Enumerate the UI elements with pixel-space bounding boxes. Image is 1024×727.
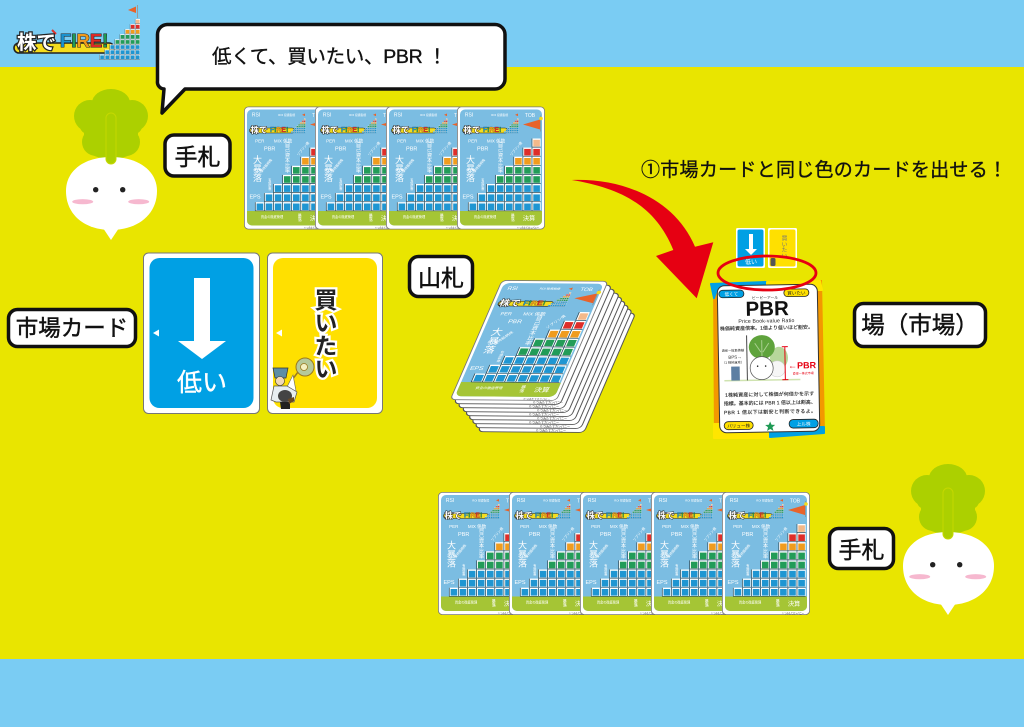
card 5: PBR	[742, 532, 753, 538]
card 1: 暴落	[298, 212, 303, 222]
card 2: ROI 投資指標	[543, 498, 560, 502]
top card of deck: EPS	[469, 366, 485, 372]
card 4: 決算	[523, 214, 535, 222]
card 1	[438, 492, 526, 615]
card 2: 株で	[321, 125, 339, 135]
top card of deck: TOB	[579, 288, 594, 293]
top card of deck	[450, 280, 608, 401]
mini card: 買いたい: 買いたい	[780, 235, 787, 259]
card 4: EPS	[462, 194, 474, 200]
logo: 株でFIRE!	[14, 5, 140, 59]
card 2: 有価証券	[339, 177, 343, 191]
top card of deck: © つみたてカンパニー	[523, 397, 551, 401]
card 3: RSI	[394, 112, 402, 118]
card 1: EPS	[249, 194, 261, 200]
explanation text	[724, 390, 816, 416]
card 2: 自己資本比率	[355, 140, 361, 174]
card 4: 優待銘柄株	[665, 542, 681, 559]
field card: PBR	[711, 280, 825, 439]
card 2: © つみたてカンパニー	[569, 611, 591, 615]
card 3: 自己資本比率	[426, 140, 432, 174]
card 1: FIRE!	[270, 127, 288, 134]
card 4: ROI 投資指標	[685, 498, 702, 502]
card 3: TOB	[648, 498, 659, 504]
illustration: radish price vs book value: （1 株純資産）	[722, 359, 744, 365]
card 1: PBR	[458, 532, 469, 538]
colored card edges	[711, 280, 825, 439]
illustration: radish price vs book value	[721, 334, 817, 381]
card 1: © つみたてカンパニー	[304, 226, 326, 230]
card 1: 大暴落	[252, 154, 262, 183]
card 2: 暴落	[369, 212, 374, 222]
card 4: 大暴落	[659, 539, 669, 568]
card face: PBR	[745, 297, 789, 321]
card 5: EPS	[727, 580, 739, 586]
card 3	[386, 107, 474, 230]
pill: 買いたい: 買いたい	[787, 291, 806, 297]
card 3: 決算	[646, 600, 658, 608]
label: 手札 (top)	[165, 135, 230, 176]
card 3: © つみたてカンパニー	[446, 226, 468, 230]
card 5: FIRE!	[748, 512, 766, 520]
pill: 低くて: 低くて	[724, 291, 739, 298]
card 1: TOB	[506, 498, 517, 504]
card 5: 有価証券	[746, 563, 750, 577]
card 5: TOB	[790, 498, 801, 504]
card 4: ソブリン債	[508, 140, 524, 157]
pill: 買いたい	[784, 289, 809, 297]
card 4: FIRE!	[483, 127, 501, 134]
card 3: TOB	[454, 113, 465, 119]
card 2: 株で	[515, 510, 533, 520]
deck: 山札 stack of cards: © つみたてカンパニー	[537, 416, 567, 420]
card 4: PBR	[477, 146, 488, 152]
card face: Price Book-value Ratio	[738, 318, 795, 325]
card 4: RSI	[659, 498, 667, 504]
card 1: ソブリン債	[295, 140, 311, 157]
card 2: 決算	[381, 214, 393, 222]
card 1: 自己資本比率	[284, 140, 290, 174]
card 2: 資金の徹底管理	[332, 214, 355, 219]
card 1: ソブリン債	[489, 525, 505, 542]
top card of deck: 自己資本比率	[522, 314, 544, 347]
card 5: 株で	[728, 510, 746, 520]
card 4: 優待銘柄株	[471, 157, 487, 174]
card 2: RSI	[323, 112, 331, 118]
card 5	[722, 492, 810, 615]
card 1: 大暴落	[446, 539, 456, 568]
illustration: radish price vs book value: 直接ー株式市場	[793, 370, 814, 376]
card 2: EPS	[320, 194, 332, 200]
card 3: EPS	[585, 580, 597, 586]
card 1: TOB	[312, 113, 323, 119]
card 5: ソブリン債	[773, 525, 789, 542]
card 4: 資金の徹底管理	[474, 214, 497, 219]
card 4: RSI	[465, 112, 473, 118]
card 1: FIRE!	[464, 512, 482, 520]
card 2: 有価証券	[533, 563, 537, 577]
card 4: 暴落	[511, 212, 516, 222]
card 1: RSI	[252, 112, 260, 118]
mini card: 低い: 低い	[745, 258, 757, 266]
card 3: MIX 係数	[416, 138, 435, 144]
card 2: PER	[520, 524, 530, 529]
top card of deck: PBR	[507, 319, 524, 325]
card 3: 優待銘柄株	[594, 542, 610, 559]
label: 場（市場）	[854, 304, 986, 346]
card 4: 自己資本比率	[691, 526, 697, 560]
label: 山札: 山札	[418, 265, 464, 291]
card 1: 暴落	[492, 598, 497, 608]
card 4: PBR	[671, 532, 682, 538]
card 4: © つみたてカンパニー	[711, 611, 733, 615]
card 3: ROI 投資指標	[614, 498, 631, 502]
card 2: 優待銘柄株	[329, 157, 345, 174]
card 4: FIRE!	[677, 512, 695, 520]
pill: バリュー株: バリュー株	[727, 422, 751, 430]
speech bubble	[157, 24, 505, 113]
card 5: ROI 投資指標	[756, 498, 773, 502]
card 2: 資金の徹底管理	[526, 600, 549, 604]
top card of deck: ROI 投資指標	[539, 286, 562, 291]
card 1: ROI 投資指標	[278, 113, 295, 117]
instruction heading: ①市場カードと同じ色のカードを出せる！	[641, 159, 1007, 181]
card 3: 大暴落	[588, 539, 598, 568]
card 3: 暴落	[440, 212, 445, 222]
card 2: EPS	[514, 580, 526, 586]
top card of deck: 暴落	[518, 385, 528, 394]
top card of deck: 優待銘柄株	[493, 330, 514, 346]
top card of deck: 株で	[497, 298, 523, 309]
card 2	[509, 492, 597, 615]
pill: 上ル株	[789, 419, 818, 428]
card 3: ソブリン債	[437, 140, 453, 157]
card 4: MIX 係数	[681, 523, 700, 530]
card 3: 有価証券	[410, 177, 414, 191]
card 1: 優待銘柄株	[452, 542, 468, 559]
card 5: 暴落	[776, 598, 781, 608]
card 4: 暴落	[705, 598, 710, 608]
card 3: MIX 係数	[610, 523, 629, 530]
card 4	[457, 107, 545, 230]
card 1: 資金の徹底管理	[261, 214, 284, 219]
pill: 上ル株: 上ル株	[797, 420, 811, 428]
deck: 山札 stack of cards: © つみたてカンパニー	[540, 424, 570, 428]
card 3	[580, 492, 668, 615]
card 5: RSI	[730, 498, 738, 504]
top card of deck: 大暴落	[479, 327, 504, 355]
card 3: 決算	[452, 214, 464, 222]
card 4: 大暴落	[465, 154, 475, 183]
card 1: 自己資本比率	[478, 526, 484, 560]
card 1: EPS	[443, 580, 455, 586]
card 3: PBR	[600, 532, 611, 538]
label: 手札 (top): 手札	[174, 144, 220, 170]
pill: バリュー株	[724, 421, 753, 430]
card 3: PER	[397, 138, 407, 144]
deck: 山札 stack of cards: © つみたてカンパニー	[537, 408, 567, 412]
card 4: 自己資本比率	[497, 140, 503, 174]
deck: 山札 stack of cards: © つみたてカンパニー	[529, 412, 559, 416]
character: radish bottom right	[903, 464, 994, 615]
highlight: red ellipse	[718, 256, 816, 290]
card 2: RSI	[517, 498, 525, 504]
card 3: 大暴落	[394, 154, 404, 183]
card 1	[244, 107, 332, 230]
label: 市場カード: 市場カード	[16, 316, 128, 341]
card 2: TOB	[577, 498, 588, 504]
hand cards (bottom)	[438, 492, 810, 615]
card 3: 資金の徹底管理	[597, 600, 620, 604]
card 5: MIX 係数	[752, 523, 771, 530]
card 3: 株で	[392, 125, 410, 135]
card 3: FIRE!	[412, 127, 430, 134]
card 3: PBR	[406, 146, 417, 152]
card 1: 有価証券	[268, 177, 272, 191]
card 4: PER	[468, 138, 478, 144]
card 3: ソブリン債	[631, 525, 647, 542]
deck: 山札 stack of cards: © つみたてカンパニー	[529, 420, 559, 424]
card 2: FIRE!	[535, 512, 553, 520]
card 3: © つみたてカンパニー	[640, 611, 662, 615]
card 3: 自己資本比率	[620, 526, 626, 560]
icon: samurai mascot with fan	[271, 358, 314, 409]
card 2: MIX 係数	[539, 523, 558, 530]
logo: 株でFIRE!: 株で	[17, 32, 56, 54]
card 2: ROI 投資指標	[349, 113, 366, 117]
top card of deck: 決算	[533, 386, 551, 394]
card 2: PER	[326, 138, 336, 144]
top card of deck: RSI	[506, 286, 519, 292]
top card of deck: PER	[499, 312, 513, 317]
card 1: 有価証券	[462, 563, 466, 577]
card 1: 優待銘柄株	[258, 157, 274, 174]
card 3: ROI 投資指標	[420, 113, 437, 117]
card 3: FIRE!	[606, 512, 624, 520]
top card of deck: 有価証券	[495, 350, 505, 363]
card 2: TOB	[383, 113, 394, 119]
card 5: 大暴落	[730, 539, 740, 568]
card 1: ROI 投資指標	[472, 498, 489, 502]
card 4: 有価証券	[481, 177, 485, 191]
card 2: © つみたてカンパニー	[375, 226, 397, 230]
card 1: PER	[449, 524, 459, 529]
explanation text: 指標。基本的には PBR 1 倍以上は割高、	[724, 399, 816, 407]
card 4: 株で	[463, 125, 481, 135]
hand cards (top)	[244, 107, 545, 230]
label: 手札 (bottom): 手札	[838, 537, 884, 563]
top card of deck: MIX 係数	[522, 310, 547, 317]
card 4: MIX 係数	[487, 138, 506, 144]
card 1: MIX 係数	[468, 523, 487, 530]
card face	[717, 284, 820, 433]
icon: star	[765, 421, 775, 431]
illustration: radish price vs book value: 資産ー総負債額	[722, 347, 745, 353]
label: 場（市場）: 場（市場）	[861, 312, 979, 338]
card 4: 資金の徹底管理	[668, 600, 691, 604]
card 2: FIRE!	[341, 127, 359, 134]
card 4: 有価証券	[675, 563, 679, 577]
card 3: 有価証券	[604, 563, 608, 577]
card 2: 決算	[575, 600, 587, 608]
card 3: 暴落	[634, 598, 639, 608]
card 4: ソブリン債	[702, 525, 718, 542]
card 2: 大暴落	[517, 539, 527, 568]
card 2: 優待銘柄株	[523, 542, 539, 559]
card 3: 優待銘柄株	[400, 157, 416, 174]
card 3: 資金の徹底管理	[403, 214, 426, 219]
logo: 株でFIRE!: FIRE!	[60, 30, 108, 51]
mini market cards above field	[736, 228, 797, 268]
deck: 山札 stack of cards: © つみたてカンパニー	[533, 400, 563, 404]
illustration: radish price vs book value: ←PBR	[788, 360, 817, 371]
card 2: ソブリン債	[560, 525, 576, 542]
card 1: RSI	[446, 498, 454, 504]
arrow: red curved arrow to field	[572, 180, 713, 298]
card 4: TOB	[719, 498, 730, 504]
card 2	[315, 107, 403, 230]
card 5: PER	[733, 524, 743, 529]
pill: 低くて	[719, 290, 744, 298]
top card of deck: FIRE!	[522, 299, 547, 307]
card face: ビーピーアール	[752, 295, 778, 300]
card 2: 自己資本比率	[549, 526, 555, 560]
character: radish top left	[66, 89, 157, 240]
card 2: MIX 係数	[345, 138, 364, 144]
card 5: 優待銘柄株	[736, 542, 752, 559]
card 1: 株で	[250, 125, 268, 135]
card 1: 決算	[310, 214, 322, 222]
card 3: EPS	[391, 194, 403, 200]
deck: 山札 stack of cards: © つみたてカンパニー	[536, 428, 566, 432]
card 2: 暴落	[563, 598, 568, 608]
deck: 山札 stack of cards	[450, 280, 636, 433]
card 3: PER	[591, 524, 601, 529]
card 1: 資金の徹底管理	[455, 600, 478, 604]
card 1: © つみたてカンパニー	[498, 611, 520, 615]
card 3: RSI	[588, 498, 596, 504]
card 1: MIX 係数	[274, 138, 293, 144]
label: 手札 (bottom)	[830, 528, 894, 568]
card 1: PBR	[264, 146, 275, 152]
card 3: 株で	[586, 510, 604, 520]
card 1: PER	[255, 138, 265, 144]
card 2: PBR	[335, 146, 346, 152]
illustration: radish price vs book value: BPS→	[728, 354, 742, 360]
card 1: 決算	[504, 600, 516, 608]
card 4: PER	[662, 524, 672, 529]
card 2: ソブリン債	[366, 140, 382, 157]
card 4: 決算	[717, 600, 729, 608]
card 4: © つみたてカンパニー	[517, 226, 539, 230]
card 5: © つみたてカンパニー	[782, 611, 804, 615]
market card: 買いたい	[268, 253, 382, 414]
card face: 株価純資産倍率。1倍より低いほど割安。	[720, 324, 813, 332]
speech bubble: 低くて、買いたい、PBR ！	[212, 46, 447, 68]
market card: 買いたい: 買いたい	[311, 288, 338, 380]
card 1: 株で	[444, 510, 462, 520]
market card: 低い: 低い	[177, 369, 227, 397]
label: 山札	[410, 256, 472, 296]
deck: 山札 stack of cards: © つみたてカンパニー	[529, 404, 559, 408]
top card of deck: 資金の徹底管理	[475, 386, 504, 390]
card 5: 資金の徹底管理	[739, 600, 762, 604]
card 5: 決算	[788, 600, 800, 608]
explanation text: 1株純資産に対して株価が何倍かを示す	[725, 390, 814, 399]
card 4: TOB	[525, 113, 536, 119]
card 4: EPS	[656, 580, 668, 586]
card 2: 大暴落	[323, 154, 333, 183]
card 4: 株で	[657, 510, 675, 520]
card 4: ROI 投資指標	[491, 113, 508, 117]
card 2: PBR	[529, 532, 540, 538]
explanation text: PBR 1 倍以下は割安と判断できるよ。	[724, 408, 816, 416]
market card: 低い	[144, 253, 260, 414]
card 5: 自己資本比率	[762, 526, 768, 560]
card 4	[651, 492, 739, 615]
top card of deck: ソブリン債	[545, 314, 567, 329]
label: 市場カード	[8, 310, 136, 346]
